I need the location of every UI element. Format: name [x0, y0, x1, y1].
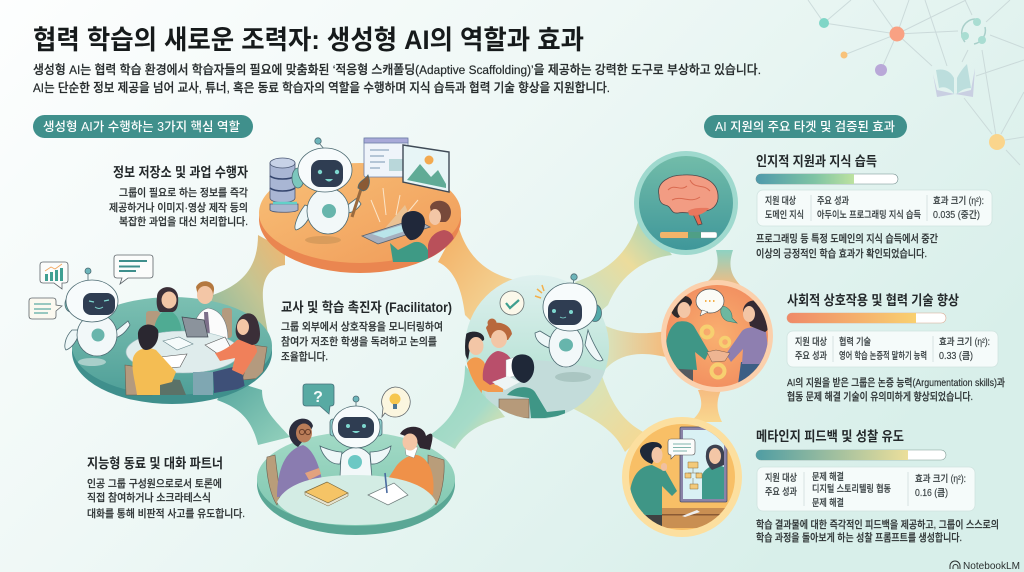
spark marks	[535, 285, 544, 298]
disc	[72, 297, 272, 404]
description: 프로그래밍 등 특정 도메인의 지식 습득에서 중간	[756, 233, 938, 245]
description	[787, 376, 1005, 403]
data table: 문제 해결	[812, 470, 844, 483]
text: information storage role	[109, 165, 249, 228]
description	[756, 233, 938, 260]
text: information storage role: 제공하거나 이미지·영상 제작 등의	[109, 201, 248, 214]
panel: cognitive support	[756, 154, 992, 260]
description: 학습 과정을 돌아보게 하는 성찰 프롬프트를 생성합니다.	[756, 531, 962, 544]
text: information storage role: 그룹이 필요로 하는 정보를 즉각	[119, 186, 248, 199]
man in green	[666, 296, 709, 381]
people around table	[125, 281, 267, 395]
data table: 협력 기술	[839, 335, 871, 348]
question bubble: ?	[313, 389, 323, 406]
text: facilitator role: 참여가 저조한 학생을 독려하고 논의를	[281, 335, 437, 348]
question bubble	[303, 384, 334, 414]
server	[270, 158, 298, 212]
text: facilitator role	[281, 300, 452, 363]
students	[465, 318, 565, 418]
data table	[787, 331, 998, 367]
robot	[320, 396, 391, 478]
social interaction circle	[661, 280, 773, 392]
data table	[757, 467, 975, 511]
decorative network top right	[808, 0, 1024, 165]
man	[630, 442, 677, 528]
gears	[702, 326, 730, 378]
data table: 0.33 (큼)	[939, 350, 973, 362]
data table: 효과 크기 (η²):	[939, 336, 990, 348]
icon: cycle of people	[961, 18, 986, 44]
intro text: AI는 단순한 정보 제공을 넘어 교사, 튜너, 혹은 동료 학습자의 역할을 수행하며 지식 습득과 협력 기술 향상을 지원합니다.	[33, 80, 610, 95]
browser window	[364, 138, 408, 177]
text: facilitator role: 그룹 외부에서 상호작용을 모니터링하여	[281, 320, 443, 333]
progress bar	[756, 450, 946, 460]
data table: 0.16 (큼)	[915, 487, 948, 499]
text: information storage role: 복잡한 과업을 대신 처리합니다.	[119, 215, 248, 228]
pill heading: three roles	[33, 115, 253, 138]
handshake	[707, 350, 730, 362]
pill heading: targets and effects: AI 지원의 주요 타겟 및 검증된 효과	[715, 120, 895, 134]
text: intelligent peer role: 인공 그룹 구성원으로로서 토론에	[87, 477, 222, 490]
intro text	[33, 62, 761, 95]
data table: 지원 대상	[765, 194, 796, 207]
data table: 문제 해결	[812, 496, 844, 509]
brain circle	[634, 151, 738, 255]
icon: open book	[933, 64, 975, 97]
picture frame	[403, 145, 449, 192]
description: 이상의 긍정적인 학습 효과가 확인되었습니다.	[756, 247, 927, 260]
heading: 메타인지 피드백 및 성찰 유도	[756, 429, 904, 444]
robot and brush	[292, 138, 369, 244]
chat bubbles	[696, 289, 737, 323]
text: intelligent peer role: 직접 참여하거나 소크라테스식	[87, 491, 211, 504]
pill heading: targets and effects	[704, 115, 907, 138]
scene: lower disc with peer robot	[257, 384, 455, 535]
light rays and students	[362, 188, 454, 262]
man with glasses	[267, 419, 322, 505]
table area	[485, 360, 604, 419]
scene: orange disc with creative robot	[259, 138, 461, 273]
heading: 인지적 지원과 지식 습득	[756, 154, 877, 169]
data table: 주요 성과	[795, 350, 827, 362]
panel: metacognitive feedback	[756, 429, 999, 544]
text: information storage role: 정보 저장소 및 과업 수행자	[113, 165, 249, 180]
robot	[535, 274, 603, 382]
flow connectors between scenes	[200, 215, 742, 452]
table with book and paper	[277, 473, 436, 525]
icon: brain	[659, 175, 718, 225]
progress bar	[787, 313, 946, 323]
speech bubbles with chart and lists	[29, 255, 153, 319]
title: 협력 학습의 새로운 조력자: 생성형 AI의 역할과 효과	[33, 25, 584, 55]
mirror	[680, 427, 727, 502]
data table: 영어 학습 논증적 말하기 능력	[839, 349, 927, 362]
disc	[259, 163, 461, 273]
woman with ponytail	[382, 427, 444, 505]
node dots	[819, 18, 1005, 150]
central circle: facilitator robot	[453, 274, 610, 420]
text: intelligent peer role	[87, 456, 245, 520]
data table: 효과 크기 (η²):	[933, 195, 984, 207]
NotebookLM logo: NotebookLM	[963, 560, 1020, 572]
data table	[757, 190, 992, 226]
data table: 주요 성과	[817, 195, 849, 207]
woman in purple	[727, 300, 768, 382]
metacognition mirror circle	[622, 417, 742, 537]
description	[756, 518, 999, 544]
description: 협동 문제 해결 기술이 유의미하게 향상되었습니다.	[787, 390, 973, 403]
text: intelligent peer role: 대화를 통해 비판적 사고를 유도합니다.	[87, 507, 245, 520]
heading: 사회적 상호작용 및 협력 기술 향상	[787, 293, 960, 308]
data table: 주요 성과	[765, 486, 797, 498]
disc	[257, 432, 455, 535]
data table: 지원 대상	[765, 471, 797, 484]
panel: social interaction	[787, 293, 1005, 403]
data table: 디지털 스토리텔링 협동	[812, 482, 891, 495]
desk	[662, 508, 727, 528]
data table: 지원 대상	[795, 335, 827, 348]
text: intelligent peer role: 지능형 동료 및 대화 파트너	[87, 456, 223, 471]
mini progress bar	[660, 232, 717, 238]
lightbulb bubble	[382, 387, 410, 417]
data table: 아두이노 프로그래밍 지식 습득	[817, 209, 921, 221]
text: facilitator role: 교사 및 학습 촉진자 (Facilitator)	[281, 300, 452, 315]
robot	[65, 268, 130, 366]
data table: 효과 크기 (η²):	[915, 473, 966, 485]
data table: 도메인 지식	[765, 209, 804, 221]
data table: 0.035 (중간)	[933, 209, 980, 221]
check bubble	[500, 291, 524, 315]
scene: left table with robot	[29, 255, 272, 404]
progress bar	[756, 174, 898, 184]
speech bubble	[668, 439, 695, 459]
intro text: 생성형 AI는 협력 학습 환경에서 학습자들의 필요에 맞춤화된 ‘적응형 스캐폴딩(Adaptive Scaffolding)’을 제공하는 강력한 도구로 부상하고 있습니다.	[33, 62, 761, 77]
pill heading: three roles: 생성형 AI가 수행하는 3가지 핵심 역할	[43, 119, 240, 134]
text: facilitator role: 조율합니다.	[281, 350, 328, 363]
